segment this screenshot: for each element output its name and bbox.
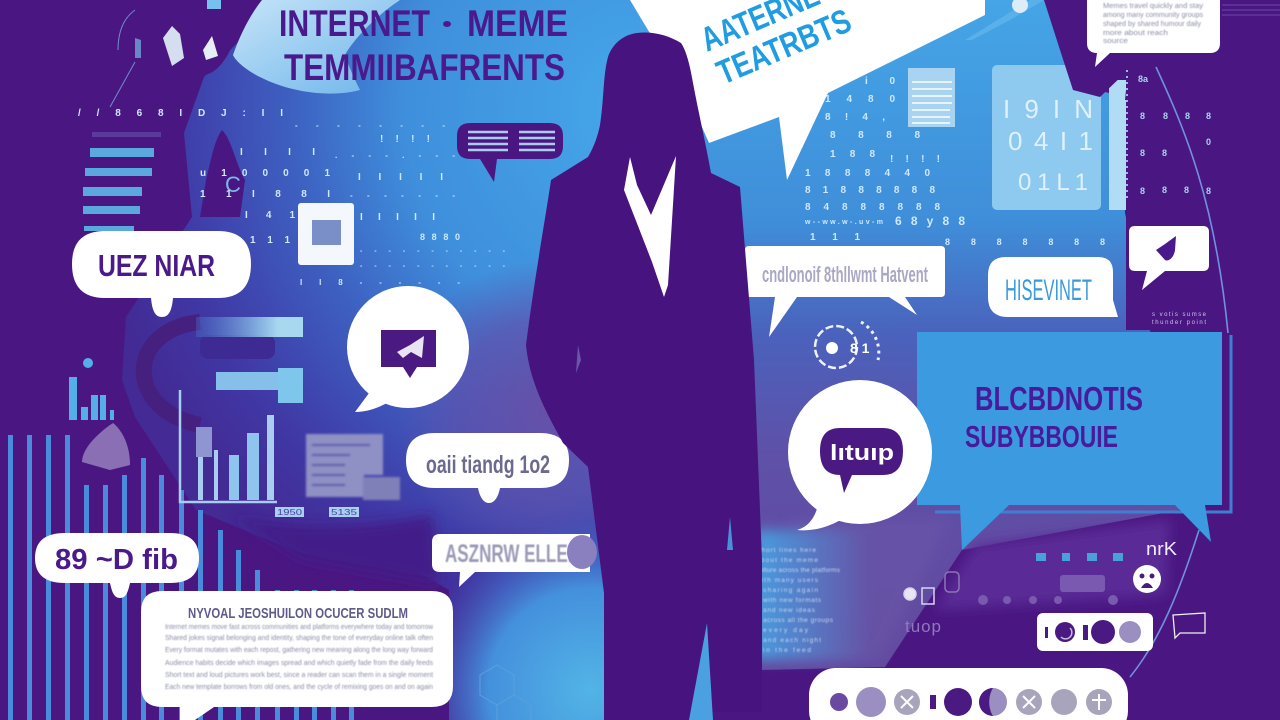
glyph grid left: ! ! ! ! xyxy=(380,134,430,145)
main bar chart xyxy=(180,390,277,502)
top right dark silhouette overlap xyxy=(1044,0,1280,100)
pale text column: every day xyxy=(763,627,809,634)
white middle speech bubble: cndlonoif 8thllwmt Hatvent xyxy=(762,262,928,287)
glyph grid right: 6 8 y 8 8 xyxy=(895,214,965,228)
glyph grid left: I 4 1 xyxy=(245,210,295,221)
glyph grid left: u 1 0 0 0 0 1 xyxy=(200,168,330,179)
top left dark figures xyxy=(110,0,245,107)
small glyph grid dark panel: 8 xyxy=(1185,111,1190,121)
right dark purple panel xyxy=(1126,60,1280,330)
large white text card: Shared jokes signal belonging and identity, shaping the tone of everyday online talk often xyxy=(165,635,433,642)
glyph grid left: / / 8 6 8 I D J : I I xyxy=(78,108,283,119)
glyph grid left xyxy=(78,108,506,287)
thumbnail images xyxy=(306,434,400,500)
light blue image panel xyxy=(992,65,1126,210)
light blue image panel: 0 4 I 1 xyxy=(1008,126,1093,156)
blue callout card: BLCBDNOTIS xyxy=(975,380,1143,417)
glyph grid left: - - - - - - - - - - - xyxy=(360,248,506,255)
glyph grid left: - - - - - - - xyxy=(350,191,455,200)
small blue squares xyxy=(1036,553,1123,561)
lavender haze left of figure xyxy=(395,260,695,560)
title xyxy=(279,3,568,88)
large white text card xyxy=(141,591,453,720)
glyph grid right: 1 8 8 8 4 4 0 xyxy=(805,168,930,179)
chart axis label 1950: 1950 xyxy=(277,508,303,517)
glyph grid right: 8 1 8 8 8 8 8 8 xyxy=(805,185,935,196)
pale text column: in the feed xyxy=(763,647,811,654)
chart axis label 5135: 5135 xyxy=(331,508,358,517)
small glyph grid dark panel: 8 xyxy=(1140,186,1145,196)
small dark note bubble: s votis sumse xyxy=(1152,312,1207,318)
chart axis label 1950 xyxy=(275,507,304,517)
thin curved line right xyxy=(1130,67,1228,677)
glyph grid left: 1 1 I 8 8 I xyxy=(200,189,330,200)
vertical stripe pattern xyxy=(8,435,354,720)
pale text column: and each night xyxy=(763,637,821,644)
glyph grid right: 1 4 8 0 xyxy=(825,94,895,105)
pale text column: across all the groups xyxy=(763,617,834,624)
speech bubble grey label xyxy=(406,433,569,503)
main top white speech bubble xyxy=(630,0,985,180)
glyph grid right: 8 8 8 8 xyxy=(830,130,920,141)
light blue image panel: 0 1 L 1 xyxy=(1018,169,1088,196)
faint hexagon pattern xyxy=(480,665,531,720)
blue callout card xyxy=(917,332,1222,550)
pale blob behind title xyxy=(233,0,400,94)
bottom white icon pill xyxy=(809,668,1128,720)
large white text card: Short text and loud pictures work best, since a reader can scan them in a single moment xyxy=(165,672,433,679)
large white text card: Internet memes move fast across communities and platforms everywhere today and tomorrow xyxy=(165,624,434,631)
pale text column: sharing again xyxy=(763,587,818,594)
lower left dark band xyxy=(230,515,440,585)
pale text column: Short lines here xyxy=(756,547,816,554)
glyph grid left: 8880 xyxy=(420,232,460,242)
faint decorative corner lines xyxy=(1222,5,1280,15)
small glyph grid dark panel: 8 xyxy=(1162,185,1167,195)
small left bar chart xyxy=(69,358,114,420)
lower centre light blue glow xyxy=(420,505,700,720)
glyph grid right xyxy=(804,76,1105,247)
top right white text card xyxy=(1087,0,1220,67)
speech bubble: UEZ NIAR: UEZ NIAR xyxy=(98,248,215,283)
background left blue blob xyxy=(122,0,700,720)
glyph grid right: 1 1 1 xyxy=(810,232,860,243)
background right blue blob xyxy=(640,0,1180,670)
small white card icon xyxy=(298,203,354,265)
dark keyhole shape xyxy=(200,130,245,217)
big white circle bubble xyxy=(788,380,932,530)
dark speech bubble with lines xyxy=(457,123,563,182)
glyph grid left: - - - - - - - - - - - xyxy=(360,263,506,270)
white middle speech bubble xyxy=(745,246,945,337)
top right white text card: Memes travel quickly and stay xyxy=(1103,3,1204,10)
light bands and squares xyxy=(196,317,303,403)
white circle speech bubble with icon xyxy=(347,286,469,412)
small glyph grid dark panel: 8 xyxy=(1140,111,1145,121)
white gear icon xyxy=(1133,565,1161,593)
large white text card: Every format mutates with each repost, gathering new meaning along the long way forward xyxy=(165,647,433,654)
large white text card: Audience habits decide which images spread and which quietly fade from the daily feeds xyxy=(165,660,433,667)
pale text column: with many users xyxy=(755,577,819,584)
top right white text card: among many community groups xyxy=(1103,12,1203,19)
dark mid purple band xyxy=(935,520,1170,610)
small dark note bubble: thunder point xyxy=(1152,320,1206,326)
small glyph grid dark panel: 0 xyxy=(1206,137,1211,147)
horizontal bar list xyxy=(83,132,161,231)
faint dots row xyxy=(978,575,1118,605)
pale text column xyxy=(755,547,841,654)
small glyph grid dark panel: 8a xyxy=(1138,74,1149,84)
white bubble with dark icon xyxy=(1129,226,1209,290)
small glyph grid dark panel xyxy=(1138,74,1211,196)
woman silhouette in suit xyxy=(526,32,762,720)
white control card xyxy=(1037,613,1153,651)
title: TEMMIIBAFRENTS xyxy=(284,47,565,88)
glyph grid left: - - - - - - - - xyxy=(295,121,445,130)
top right white text card: shaped by shared humour daily xyxy=(1103,21,1202,28)
top right white text card: source xyxy=(1103,38,1128,45)
glyph grid right: w--ww.w-.uv-m xyxy=(804,219,883,226)
small glyph grid dark panel: 8 xyxy=(1206,186,1211,196)
glyph grid right: i 0 xyxy=(865,76,895,87)
glyph grid right: 8 4 8 8 8 8 8 8 xyxy=(805,202,940,213)
glyph grid right: 8 8 8 8 8 8 8 xyxy=(945,237,1105,247)
pill bubble xyxy=(35,533,199,598)
blue callout card: SUBYBBOUIE xyxy=(965,419,1118,454)
glyph grid left: . - - - . - - - xyxy=(335,151,455,160)
glyph grid left: I I I I xyxy=(240,147,315,158)
small lavender icons xyxy=(904,572,959,636)
dark swoosh ring xyxy=(144,322,200,425)
pale text column: with new formats xyxy=(762,597,822,604)
light blue image panel: I 9 I N xyxy=(1003,94,1093,124)
outer outline of blue card xyxy=(935,335,1231,512)
big white circle bubble: lıtuıp xyxy=(830,440,894,465)
small dark note bubble xyxy=(1150,308,1209,350)
small glyph grid dark panel: 8 xyxy=(1163,111,1168,121)
keyhole glyph: C xyxy=(225,172,241,197)
glyph grid left: I I I I I xyxy=(358,172,443,183)
dark patch under bands xyxy=(200,335,275,359)
top bubble tail right with icon xyxy=(965,0,1044,40)
glyph grid right: 1 8 8 xyxy=(830,149,875,160)
lavender petal xyxy=(82,423,130,470)
small text sheet xyxy=(908,68,955,127)
HISEVINET bubble xyxy=(988,257,1118,317)
pale text column: about the meme xyxy=(756,557,818,564)
glyph grid right: ! ! ! ! xyxy=(890,154,940,165)
HISEVINET bubble: HISEVINET xyxy=(1005,274,1092,307)
speech bubble grey label: oaii tiandg 1o2 xyxy=(426,451,550,479)
gear ring icon xyxy=(815,322,879,368)
large white text card: NYVOAL JEOSHUILON OCUCER SUDLM xyxy=(188,605,408,622)
glyph grid right: 8 ! 4 , xyxy=(825,112,885,123)
outline chat icon xyxy=(1173,613,1205,638)
glyph grid left: 1 1 1 xyxy=(250,235,290,246)
speech bubble blurred label xyxy=(432,534,597,587)
pill bubble: 89 ~D fib xyxy=(55,544,178,576)
small glyph grid dark panel: 8 xyxy=(1206,111,1211,121)
glyph grid left: I I 8 - - - - - - xyxy=(300,278,460,287)
chart axis label 5135 xyxy=(329,507,359,517)
title dot xyxy=(443,21,451,27)
speech bubble: UEZ NIAR xyxy=(72,231,251,317)
title: INTERNET xyxy=(279,3,430,44)
small lavender icons: tuop xyxy=(905,617,941,636)
white label nrK: nrK xyxy=(1146,539,1177,559)
large white text card: Each new template borrows from old ones, and the cycle of remixing goes on and on again xyxy=(165,684,433,691)
glyph grid left: I I I I I xyxy=(360,212,435,223)
lower right lavender haze xyxy=(790,520,950,660)
pale text column: and new ideas xyxy=(763,607,816,614)
small glyph grid dark panel: 8 xyxy=(1184,185,1189,195)
small glyph grid dark panel: 8 xyxy=(1140,148,1145,158)
pale text column glow xyxy=(754,530,870,660)
top right white text card: more about reach xyxy=(1103,30,1168,37)
dotted vertical line xyxy=(1126,70,1128,200)
gear ring icon: 8 1 xyxy=(850,340,870,356)
title: MEME xyxy=(467,3,568,44)
speech bubble blurred label: ASZNRW ELLER xyxy=(445,540,580,568)
pale text column: culture across the platforms xyxy=(756,567,841,574)
small glyph grid dark panel: 8 xyxy=(1162,148,1167,158)
